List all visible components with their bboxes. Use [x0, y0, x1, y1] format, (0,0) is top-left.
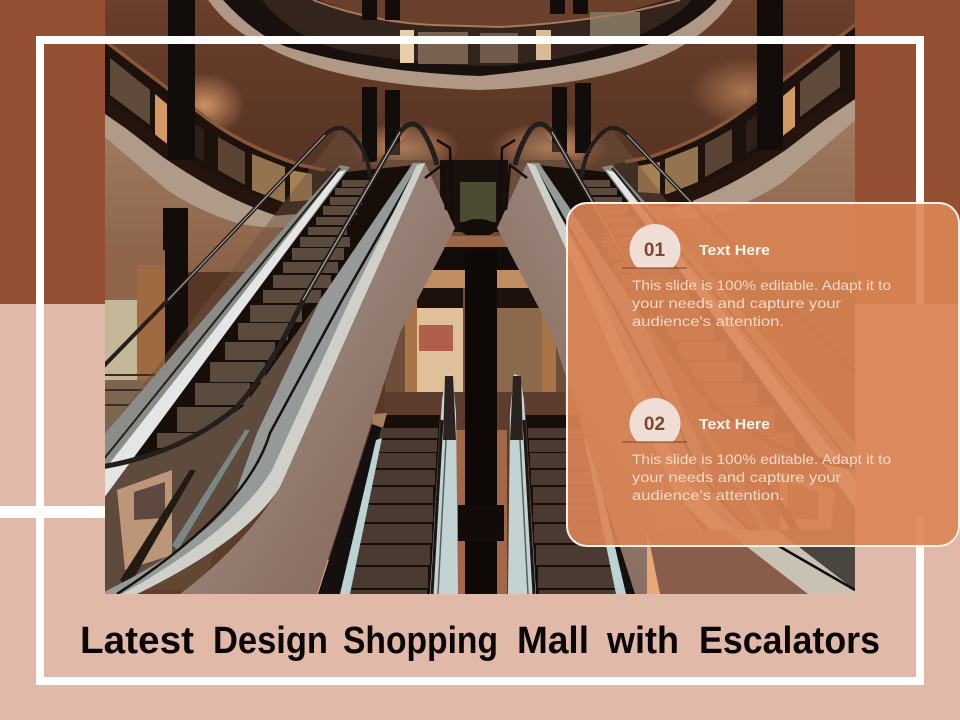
title: Design	[213, 620, 328, 662]
body text 01: your needs and capture your	[632, 295, 841, 311]
centre: shop and column	[300, 160, 580, 594]
title: Latest	[80, 620, 194, 662]
body text 02	[632, 451, 891, 503]
title	[80, 620, 880, 662]
right light block	[855, 304, 960, 517]
number badge 01	[622, 224, 687, 268]
photo-crossing top frame edge	[36, 36, 924, 44]
item 02	[622, 398, 891, 503]
heading 01: Text Here	[699, 242, 770, 259]
top balcony ring	[208, 0, 733, 90]
ceiling glows and lower ceilings	[105, 57, 855, 272]
number badge 02: 02	[644, 414, 665, 435]
upper escalators	[95, 124, 455, 594]
body text 01: audience's attention.	[632, 313, 784, 329]
number badge 01: 01	[644, 240, 665, 261]
lower left wall	[105, 250, 165, 435]
title: Mall	[517, 620, 589, 662]
title: Shopping	[343, 620, 498, 662]
body text 02: audience's attention.	[632, 487, 784, 503]
title: with	[606, 620, 679, 662]
bottom right stair side	[647, 530, 855, 594]
heading 02: Text Here	[699, 416, 770, 433]
lower escalators	[318, 374, 458, 594]
white side bar	[0, 506, 105, 518]
number badge 02	[622, 398, 687, 442]
columns	[163, 0, 783, 368]
body text 01	[632, 277, 891, 329]
item 01	[622, 224, 891, 329]
photo: shopping mall with escalators	[85, 0, 865, 594]
balconies	[105, 44, 334, 228]
title: Escalators	[699, 620, 880, 662]
translucent panel	[567, 203, 959, 546]
body text 01: This slide is 100% editable. Adapt it to	[632, 277, 891, 293]
body text 02: your needs and capture your	[632, 469, 841, 485]
body text 02: This slide is 100% editable. Adapt it to	[632, 451, 891, 467]
